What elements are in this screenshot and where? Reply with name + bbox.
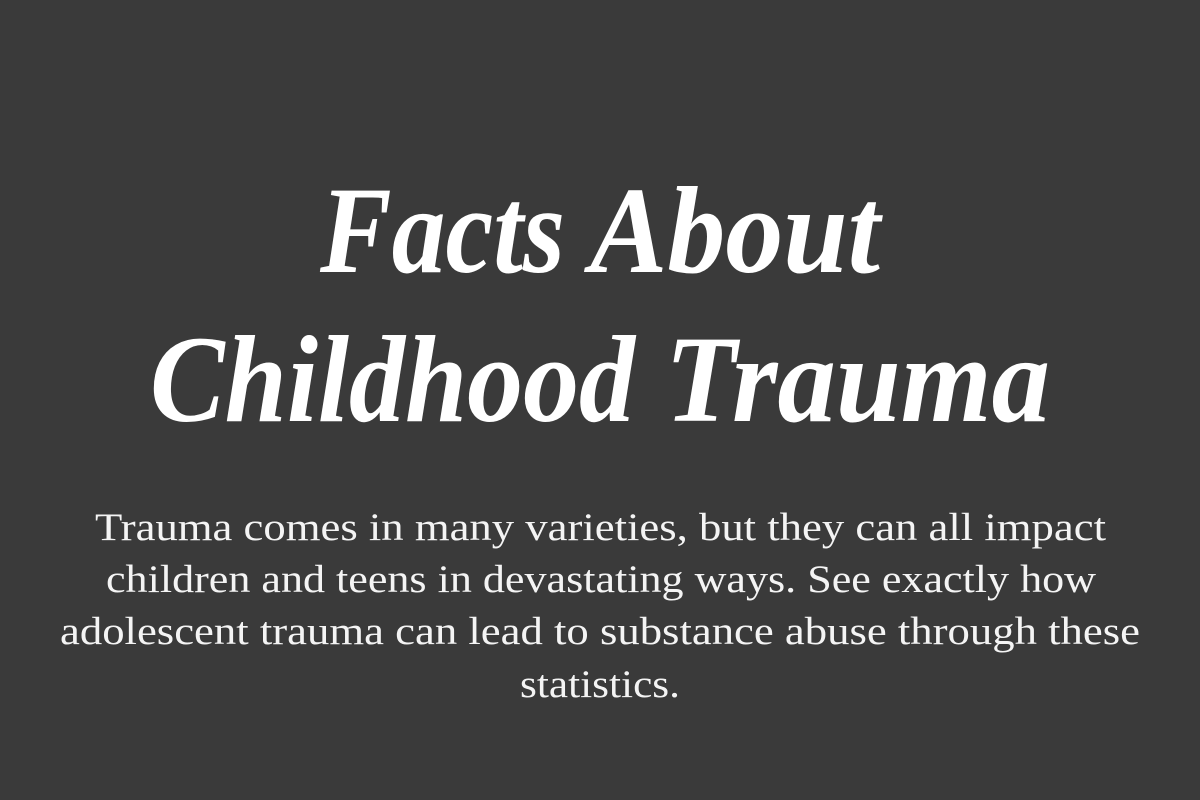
title: Facts	[319, 162, 565, 299]
intro paragraph: children and teens in devastating ways. See exactly how	[106, 558, 1096, 601]
intro paragraph: statistics.	[520, 663, 680, 706]
intro paragraph: adolescent trauma can lead to substance abuse through these	[60, 610, 1140, 653]
title	[150, 162, 1050, 448]
intro paragraph	[60, 506, 1140, 706]
intro paragraph: Trauma comes in many varieties, but they can all impact	[95, 506, 1106, 549]
title: Trauma	[665, 311, 1050, 448]
title: About	[583, 162, 883, 299]
title: Childhood	[150, 311, 637, 448]
